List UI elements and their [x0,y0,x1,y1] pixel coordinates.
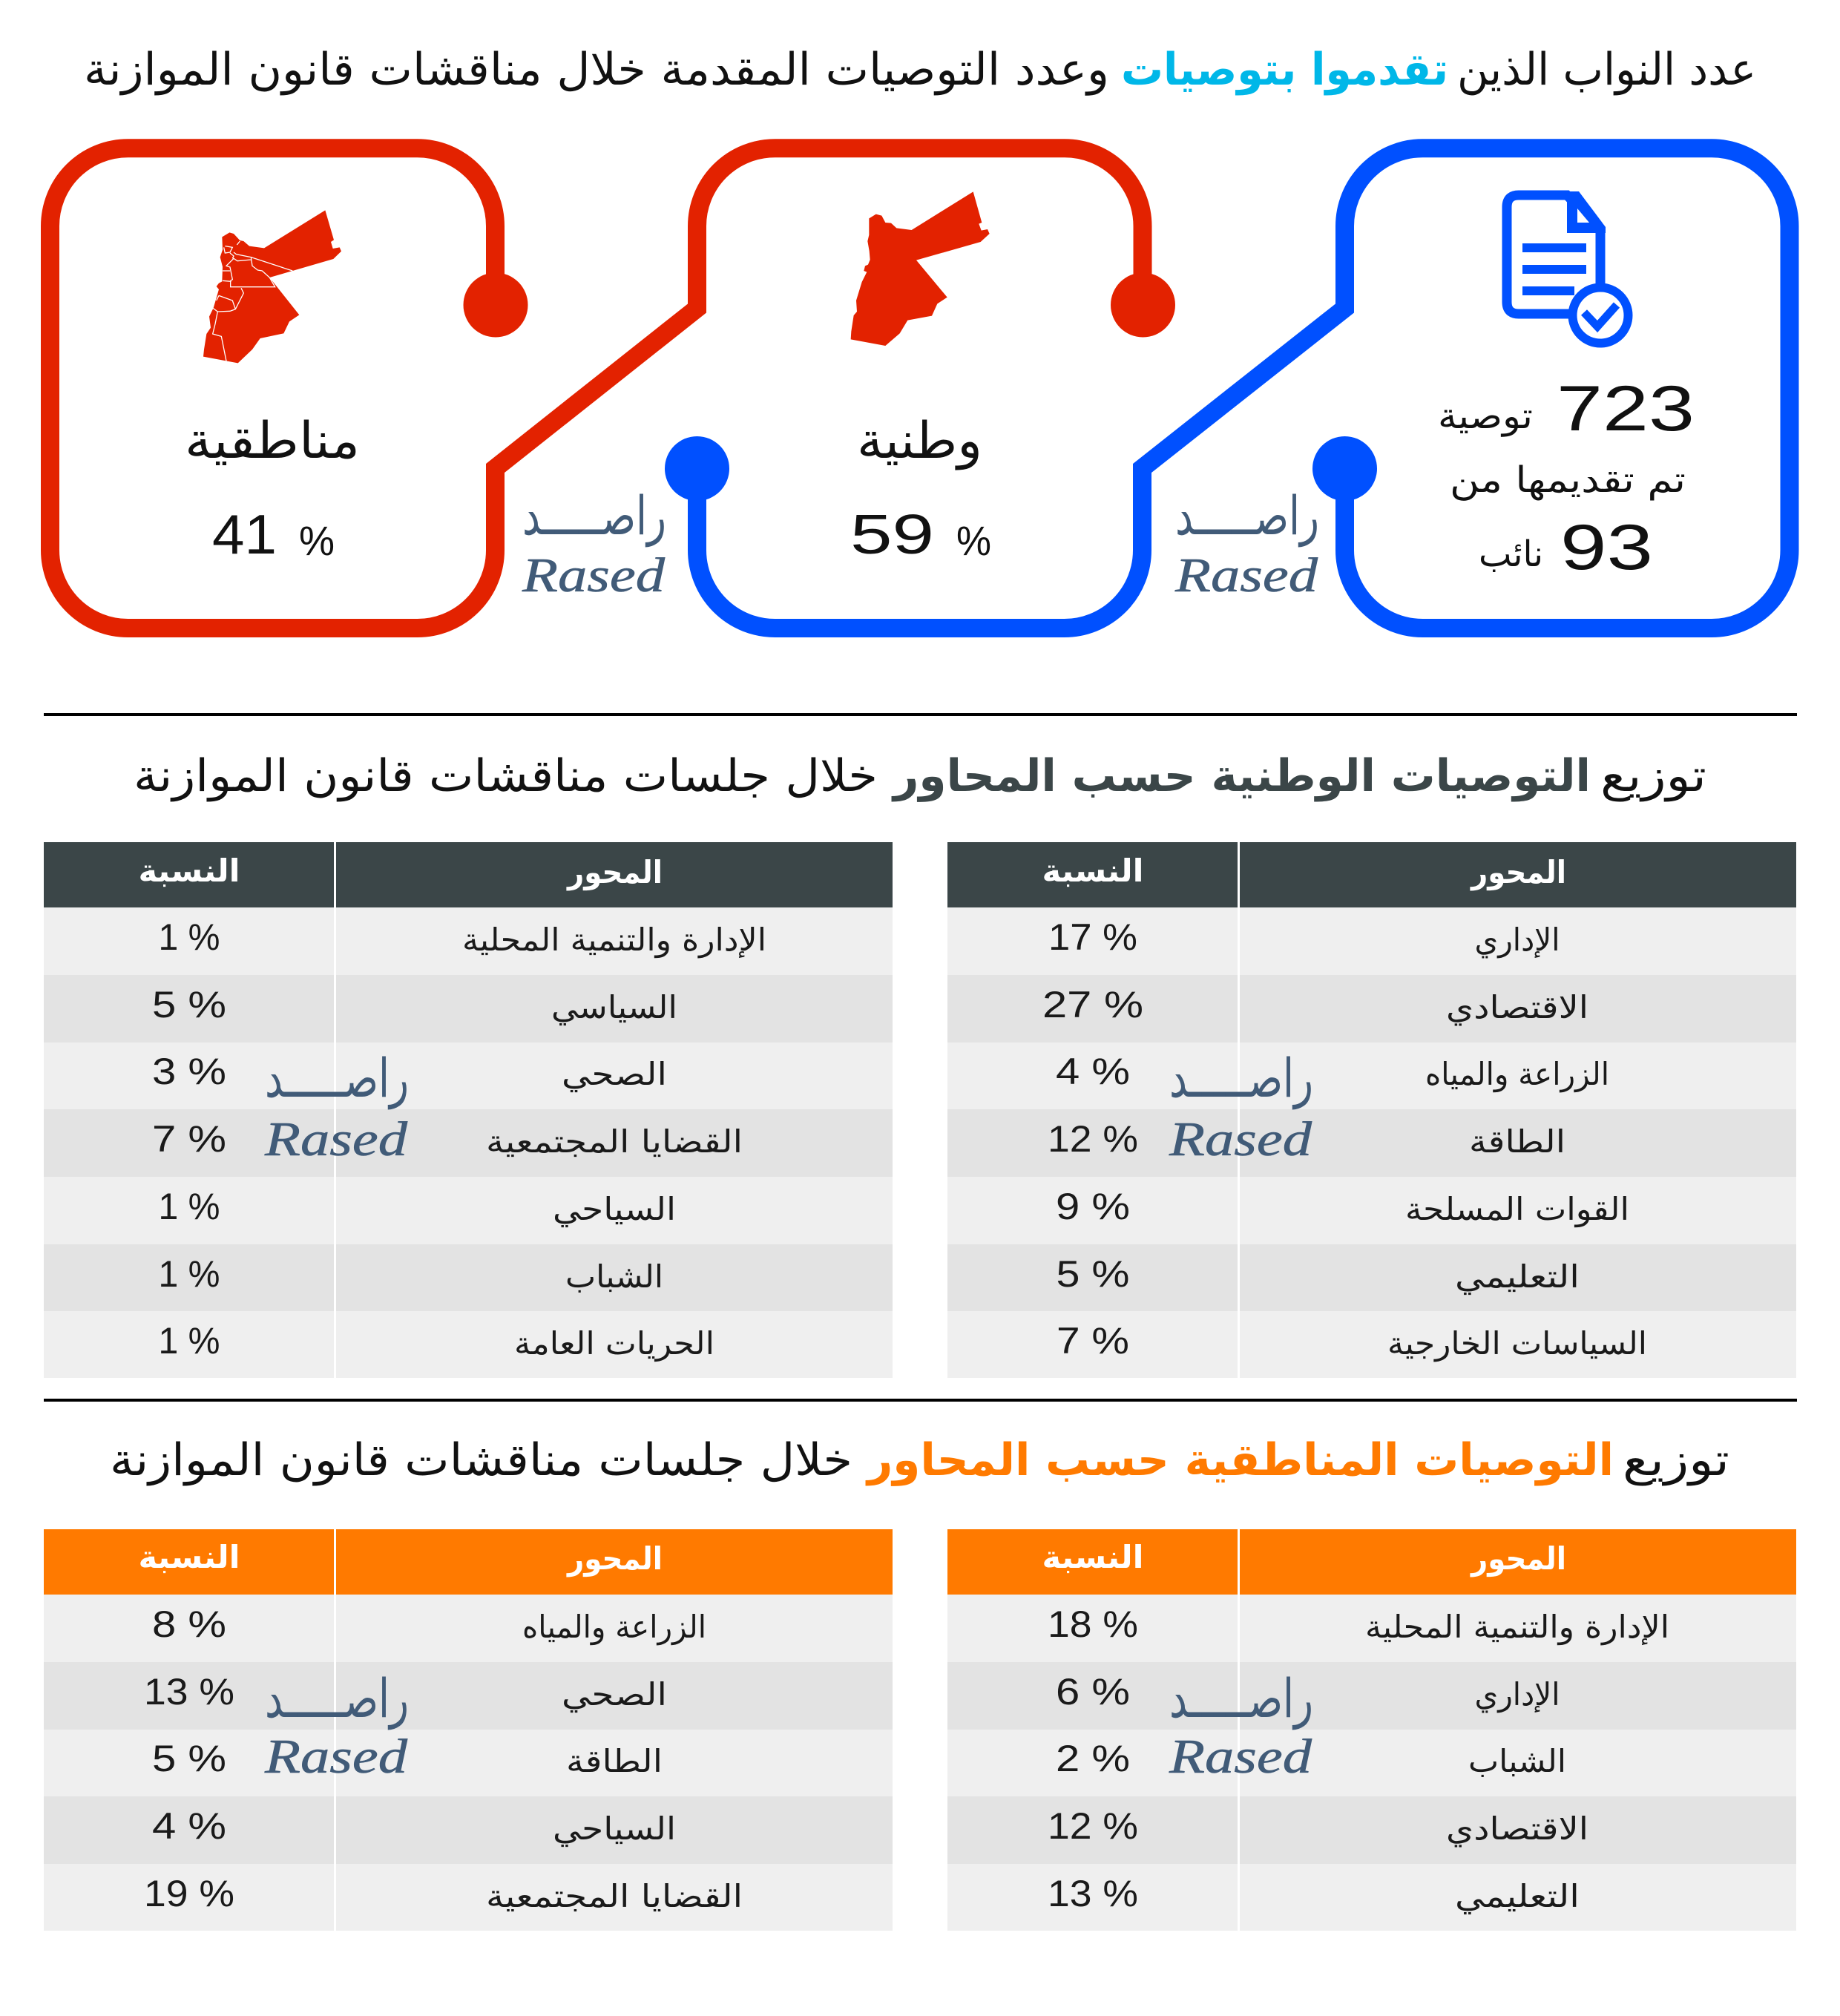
table: national right: الطاقة [1469,1123,1565,1160]
title: تقدموا بتوصيات [1121,44,1448,96]
logo: Rased: راصـــــد [1169,1667,1313,1730]
text: deputies count: 93 [1560,512,1653,583]
logo: Rased: راصـــــد [265,1667,409,1730]
logo: Rased: Rased [1169,1730,1312,1784]
icon: Jordan governorates map [203,210,341,363]
table: regional right: الاقتصادي [1446,1810,1588,1847]
logo: Rased [1174,485,1319,602]
table: regional left: 5 % [152,1738,226,1779]
table: national left: القضايا المجتمعية [486,1123,743,1160]
table: regional right: 12 % [1048,1805,1138,1847]
logo: Rased [1169,1667,1313,1784]
table: national right: السياسات الخارجية [1387,1325,1647,1362]
table: national left: الصحي [562,1056,667,1093]
table: national right: الزراعة والمياه [1425,1056,1609,1092]
logo: Rased: راصـــــد [1169,1047,1313,1110]
logo: Rased: Rased [1169,1112,1312,1166]
table: regional left: المحور [566,1540,663,1577]
table: national right: 17 % [1048,916,1137,958]
logo: Rased [1169,1047,1313,1166]
table: national left: 7 % [152,1118,226,1160]
text: regional percent: % [299,517,335,564]
table: national left: الشباب [565,1258,663,1295]
text: recommendations count: 723 [1557,373,1695,444]
table: regional left: القضايا المجتمعية [486,1878,743,1914]
table: regional left [44,1529,893,1931]
icon: Jordan map [851,191,990,346]
table: national right: 7 % [1057,1320,1129,1362]
logo: Rased: راصـــــد [522,485,666,548]
table: regional right: الشباب [1468,1743,1566,1779]
table: national left: السياحي [553,1191,676,1228]
table: national right: الاقتصادي [1446,989,1588,1025]
logo: Rased [264,1047,409,1166]
heading: national recommendations: توزيع [1600,750,1706,802]
logo: Rased [522,485,666,602]
table: regional left: الزراعة والمياه [522,1609,706,1645]
title [84,44,1756,96]
table: regional left: الصحي [562,1676,667,1713]
logo: Rased: Rased [522,548,666,602]
text: national percent: 59 [850,503,934,565]
text: deputies count: نائب [1479,533,1543,575]
text: deputies count [1479,512,1653,583]
table: national right: 12 % [1048,1118,1138,1160]
table: national right: 5 % [1057,1253,1129,1295]
table: regional left: 13 % [144,1671,234,1713]
table: regional right: النسبة [1042,1539,1144,1575]
table: national left: 1 % [159,1253,220,1295]
title: وعدد التوصيات المقدمة خلال مناقشات قانون الموازنة [84,44,1109,96]
logo: Rased [264,1667,409,1784]
table: regional right: 2 % [1056,1738,1130,1779]
table: national right [947,842,1796,1378]
table: regional right: 6 % [1056,1671,1130,1713]
table: regional left: 4 % [152,1805,226,1847]
logo: Rased: راصـــــد [265,1047,409,1110]
table: national left: النسبة [138,853,240,889]
heading: national recommendations: خلال جلسات مناقشات قانون الموازنة [134,750,878,802]
table: regional right: 18 % [1048,1603,1138,1645]
text: regional percent [212,503,335,565]
table: regional right: 13 % [1048,1873,1138,1914]
text: regional percent: 41 [212,503,277,565]
heading: regional recommendations [110,1434,1729,1486]
table: national left: 3 % [152,1051,226,1092]
text: national label: وطنية [857,412,982,470]
logo: Rased: راصـــــد [1175,485,1319,548]
text: recommendations count: توصية [1438,395,1533,437]
table: national left: 5 % [152,984,226,1025]
table: national left: الإدارة والتنمية المحلية [462,922,766,958]
heading: national recommendations [134,750,1706,802]
table: national right: النسبة [1042,853,1144,889]
heading: regional recommendations: خلال جلسات مناقشات قانون الموازنة [110,1434,852,1486]
table: national left [44,842,893,1378]
table: regional right: الإداري [1475,1676,1560,1713]
table: regional left: النسبة [138,1539,240,1575]
table: national right: 9 % [1056,1186,1130,1227]
icon: document with check badge [1507,191,1628,343]
table: regional left: الطاقة [566,1743,663,1779]
table: regional right: التعليمي [1455,1878,1580,1915]
table: national right: القوات المسلحة [1405,1191,1629,1227]
table: national right: 27 % [1042,984,1143,1025]
table: regional right [947,1529,1796,1931]
table: national right: الإداري [1475,922,1560,958]
panel: blue connector frame [665,148,1790,628]
text: national percent: % [956,517,991,564]
heading: regional recommendations: التوصيات المناطقية حسب المحاور [865,1434,1614,1486]
table: regional left: 8 % [152,1603,226,1645]
table: national right: التعليمي [1455,1258,1580,1296]
table: regional left: 19 % [144,1873,234,1914]
text: recommendations count [1438,373,1695,444]
table: national right: 4 % [1056,1051,1130,1092]
table: regional left: السياحي [553,1810,676,1848]
table: national left: المحور [566,854,663,891]
table: national left: السياسي [551,989,677,1026]
table: national left: 1 % [159,1186,220,1227]
title: عدد النواب الذين [1457,44,1756,96]
table: national right: المحور [1470,854,1566,891]
panel: red connector frame [50,148,1175,628]
text: submitted by: تم تقديمها من [1450,459,1686,501]
table: national left: الحريات العامة [514,1325,714,1362]
heading: national recommendations: التوصيات الوطنية حسب المحاور [891,750,1591,802]
table: national left: 1 % [159,1320,220,1362]
table: regional right: المحور [1470,1540,1566,1577]
logo: Rased: Rased [264,1730,408,1784]
text: national percent [850,503,991,565]
logo: Rased: Rased [1174,548,1318,602]
heading: regional recommendations: توزيع [1623,1434,1729,1486]
text: regional label: مناطقية [185,412,360,470]
logo: Rased: Rased [264,1112,408,1166]
table: national left: 1 % [159,916,220,958]
table: regional right: الإدارة والتنمية المحلية [1365,1609,1669,1645]
